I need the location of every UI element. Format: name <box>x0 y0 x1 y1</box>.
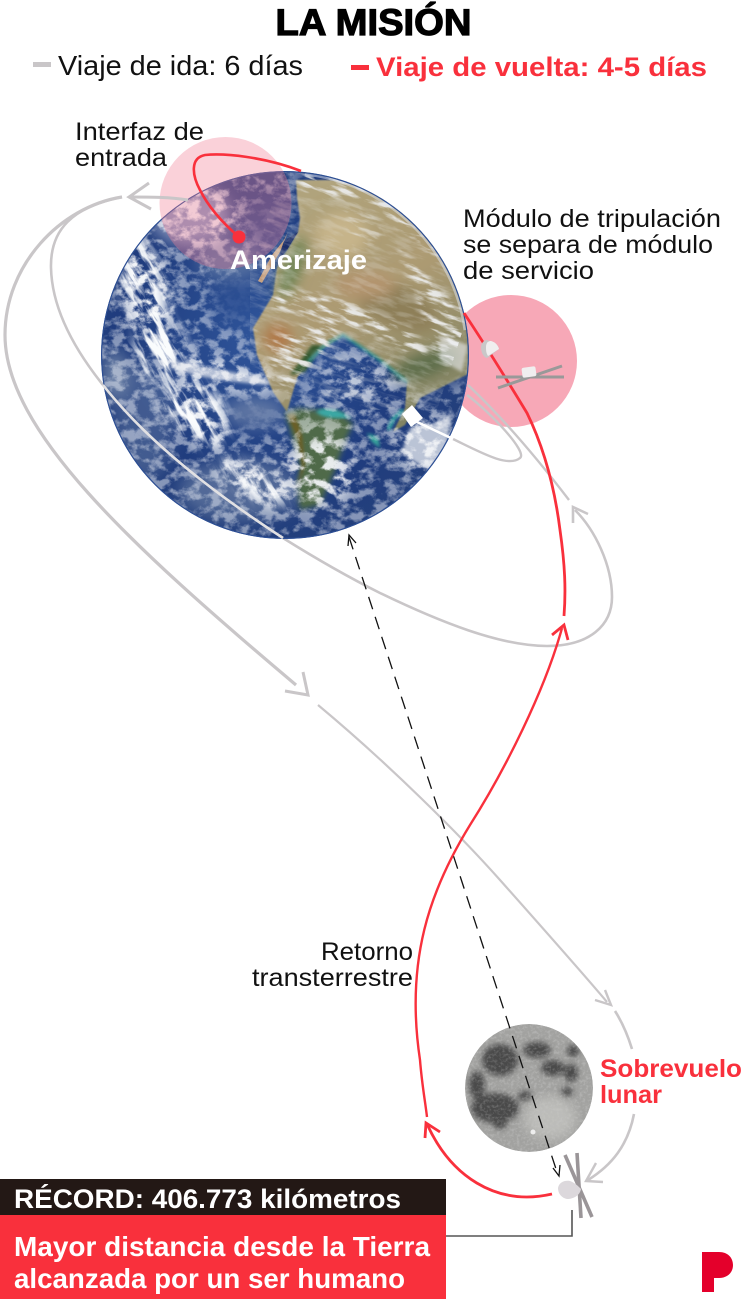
spacecraft at the Moon <box>558 1153 592 1218</box>
record box <box>0 1179 446 1299</box>
record body: alcanzada por un ser humano <box>14 1263 405 1294</box>
leader line to record box <box>446 1210 572 1236</box>
trajectory segment over Earth <box>103 385 283 538</box>
record body <box>0 1215 446 1299</box>
legend: return trip: Viaje de vuelta: 4-5 días <box>376 52 707 82</box>
label: module separation: de servicio <box>463 257 594 285</box>
label: entry interface: entrada <box>75 144 167 172</box>
arrowhead <box>595 990 611 1005</box>
limb glow <box>305 173 466 330</box>
splashdown point <box>232 230 246 244</box>
logo <box>702 1252 733 1292</box>
arrowhead: toward Moon <box>553 1165 560 1176</box>
service module <box>521 366 537 378</box>
South America <box>285 408 353 510</box>
title: LA MISIÓN <box>276 1 472 43</box>
label: lunar flyby: lunar <box>600 1081 662 1109</box>
land color variation <box>264 213 462 388</box>
outbound orbit loop behind Earth <box>51 197 612 646</box>
record header: RÉCORD: 406.773 kilómetros <box>14 1184 401 1214</box>
pink circle: module separation <box>445 295 577 427</box>
arrowhead: outbound near Earth <box>573 507 588 523</box>
Earth globe <box>101 171 469 539</box>
dashed distance line <box>348 535 560 1176</box>
capsule <box>481 340 499 358</box>
ocean <box>101 171 469 539</box>
horizontal cloud band <box>170 335 468 467</box>
legend: outbound trip: Viaje de ida: 6 días <box>58 50 303 81</box>
clouds layer <box>100 170 470 540</box>
label: entry interface <box>75 118 204 172</box>
Gulf of California <box>277 232 298 262</box>
arrowhead: toward Earth <box>348 535 356 546</box>
North America landmass <box>253 180 472 432</box>
label: module separation: Módulo de tripulación <box>463 205 721 233</box>
label: entry interface: Interfaz de <box>75 118 204 146</box>
legend <box>33 50 707 82</box>
Baja California peninsula <box>258 232 288 283</box>
label: trans-Earth return: transterrestre <box>252 964 413 992</box>
arrow: entry interface inbound <box>129 183 188 209</box>
pink circle: entry interface <box>160 137 292 269</box>
cloud streaks over land <box>250 173 465 410</box>
label: trans-Earth return <box>252 938 413 992</box>
label: splashdown: Amerizaje <box>230 245 367 275</box>
arrowhead <box>586 1163 603 1182</box>
outer outbound trajectory <box>5 197 634 1182</box>
record header <box>0 1179 446 1215</box>
spacecraft: separated capsule and service module <box>481 340 564 388</box>
diagonal cloud streaks <box>114 236 298 512</box>
service module panels <box>496 366 564 388</box>
Sierra Madre forest <box>290 345 322 375</box>
label: lunar flyby <box>600 1055 742 1109</box>
label: lunar flyby: Sobrevuelo <box>600 1055 742 1083</box>
return trajectory <box>194 155 568 1197</box>
orbit insertion point on Earth <box>402 405 453 439</box>
Moon <box>465 1024 593 1152</box>
Caribbean shallows <box>316 409 352 418</box>
gulf coast turquoise <box>308 335 407 382</box>
label: module separation <box>463 205 721 285</box>
record body: Mayor distancia desde la Tierra <box>14 1231 430 1262</box>
label: trans-Earth return: Retorno <box>321 938 413 966</box>
arrowhead <box>285 672 308 695</box>
label: module separation: se separa de módulo <box>463 231 713 259</box>
ocean haze <box>103 185 300 520</box>
